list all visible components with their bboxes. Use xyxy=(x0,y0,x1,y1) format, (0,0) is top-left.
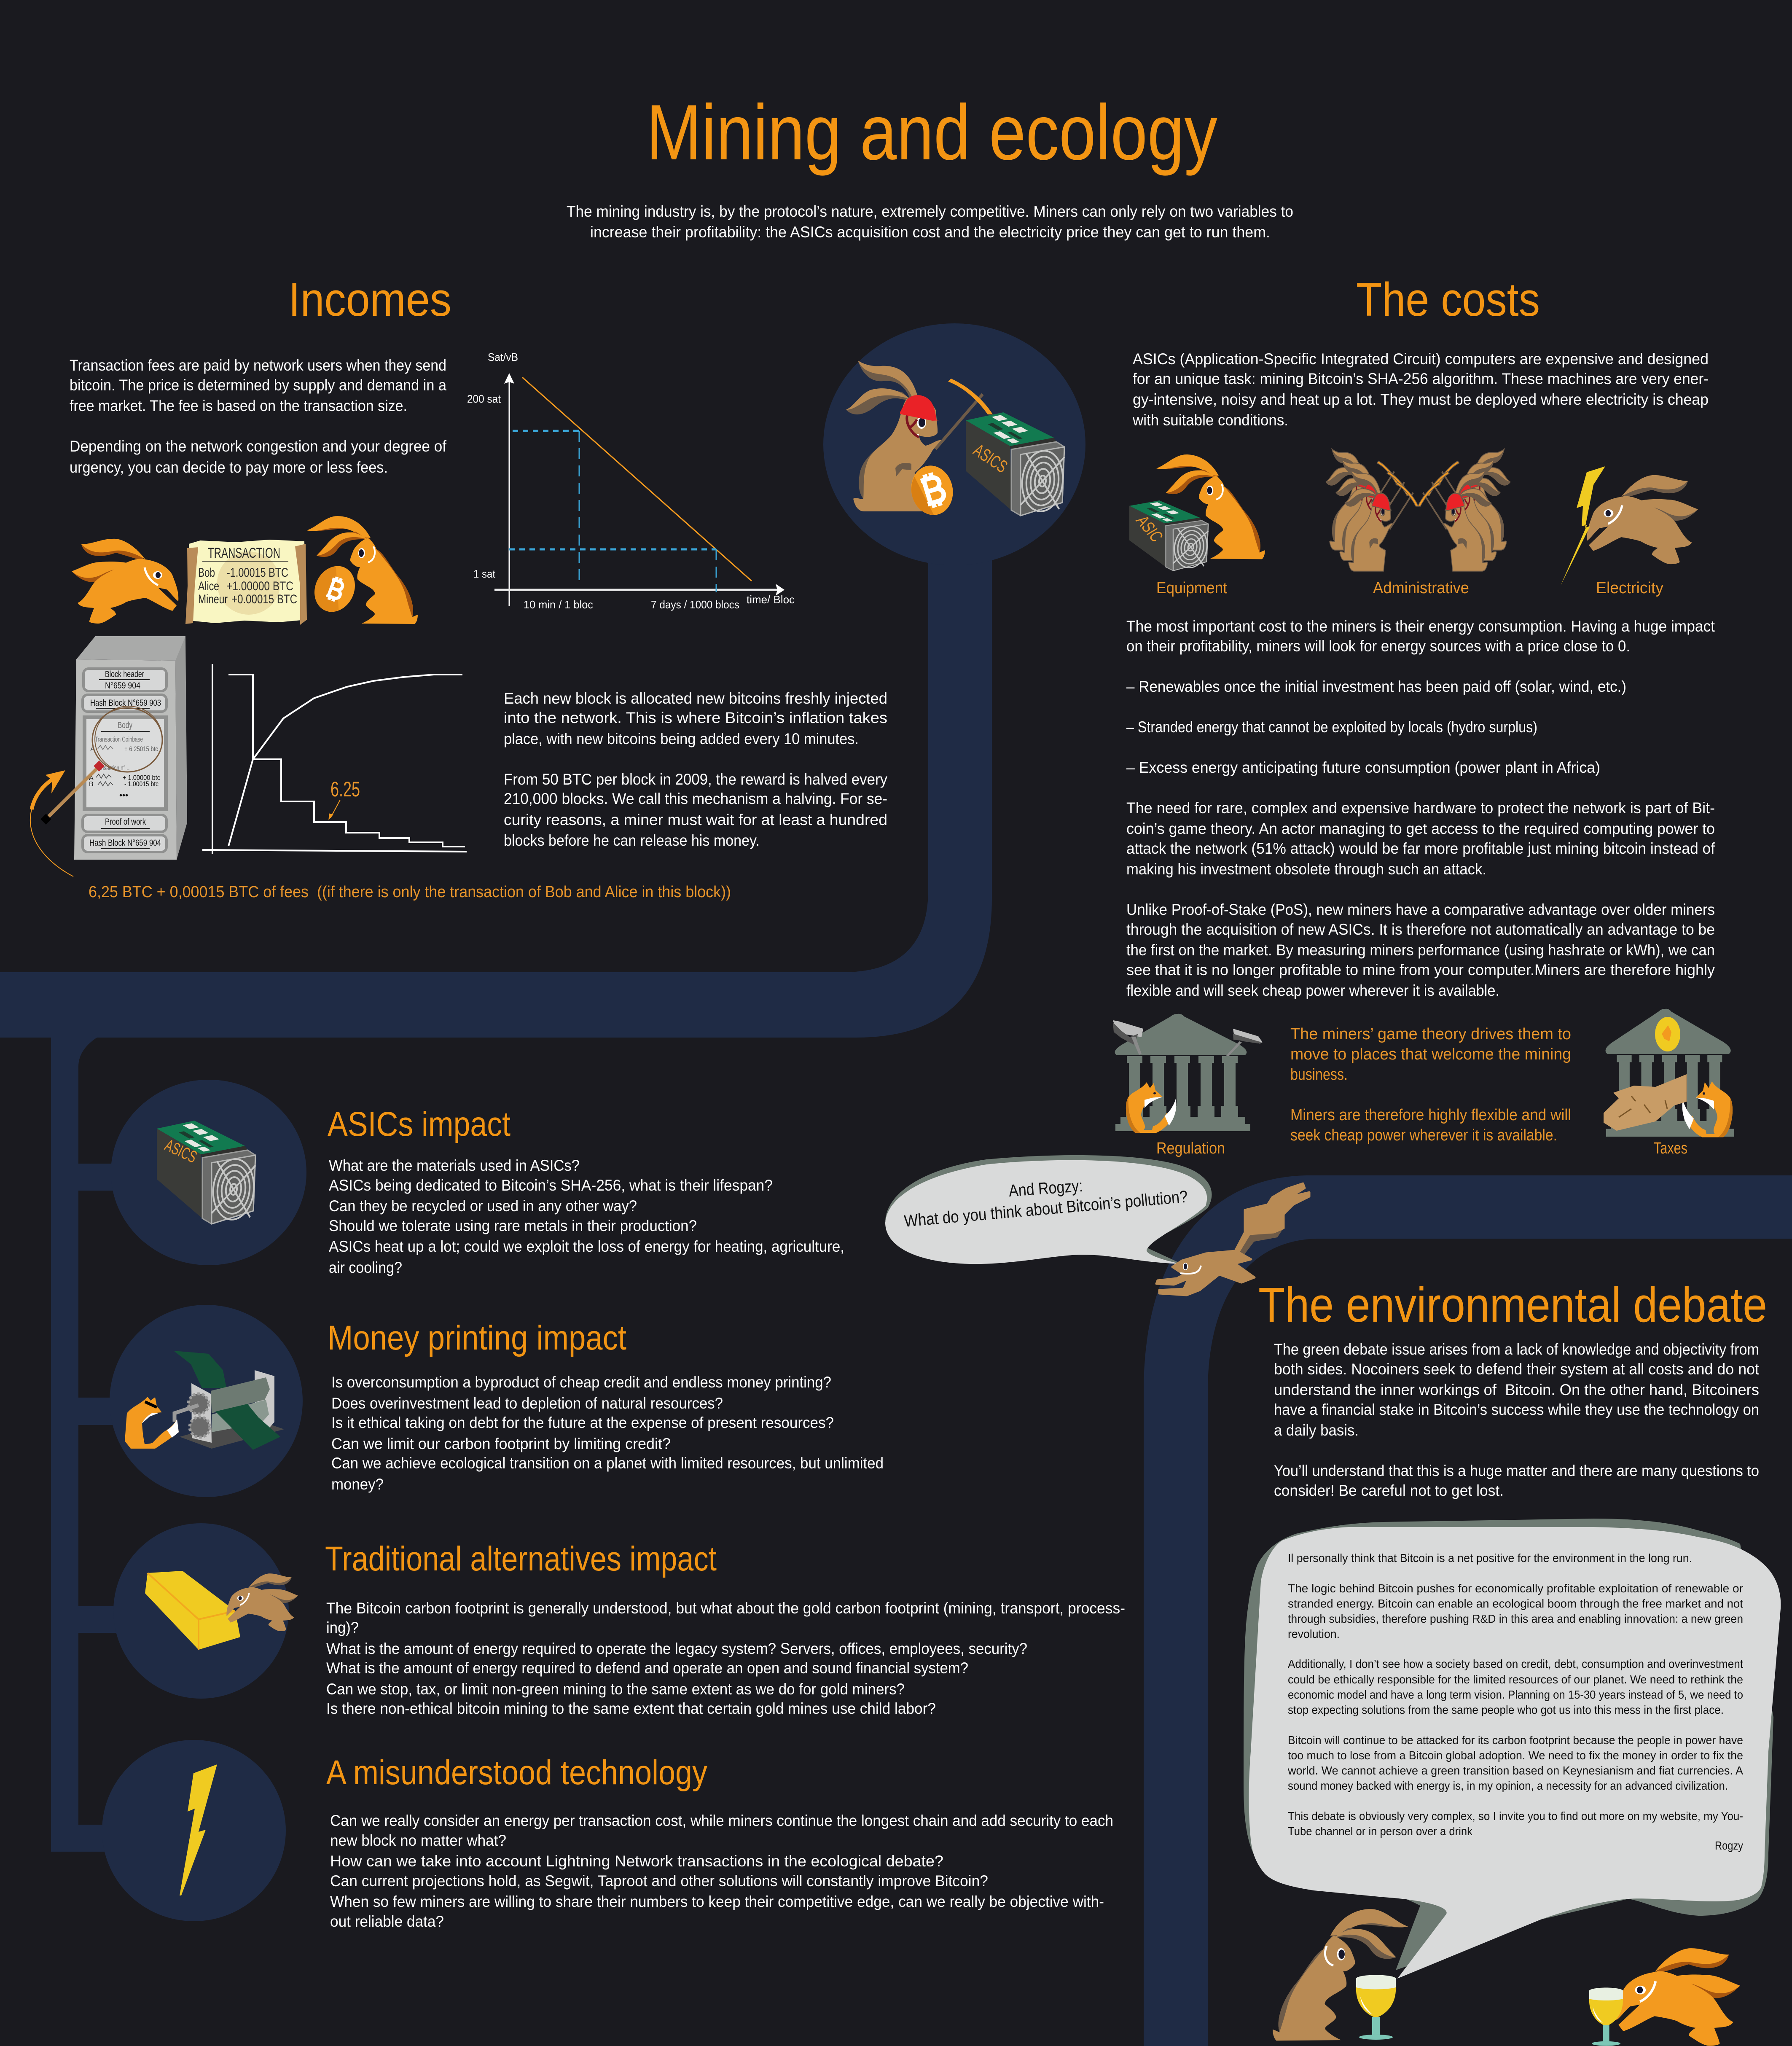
block server illustration: Transaction Coinbase xyxy=(95,735,143,743)
block server illustration: Hash Block N°659 904 xyxy=(89,838,161,848)
block server illustration: B xyxy=(89,781,94,788)
text: alternatives questions: The Bitcoin carbon footprint is generally understood, but what about the gold carbon footprint (mining, transport, process- xyxy=(326,1600,1125,1617)
text: money printing questions: Can we limit our carbon footprint by limiting credit? xyxy=(331,1435,671,1452)
costs text: energy consumption: – Excess energy anticipating future consumption (power plant in Africa) xyxy=(1126,759,1600,776)
fee chart: time/ Bloc xyxy=(747,593,795,606)
block server illustration: Proof of work xyxy=(105,817,146,827)
text: alternatives questions xyxy=(326,1600,1125,1717)
text: Rogzy's message: stop expecting solutions from the same people who got us into this mess in the first place. xyxy=(1288,1703,1724,1716)
text: money printing questions xyxy=(331,1374,884,1493)
costs text: energy consumption: – Stranded energy that cannot be exploited by locals (hydro surplus) xyxy=(1126,718,1537,736)
icon: miner rabbit with pick, bitcoin and ASIC xyxy=(846,360,1066,519)
text: environmental debate intro: a daily basis. xyxy=(1274,1422,1359,1439)
text: ASICs questions: air cooling? xyxy=(329,1259,402,1276)
fee chart: 7 days / 1000 blocs xyxy=(651,598,739,611)
intro text: increase their profitability: the ASICs acquisition cost and the electricity price they can get to run them. xyxy=(590,223,1270,241)
intro text xyxy=(567,203,1293,241)
icon: equipment xyxy=(1129,454,1265,571)
text: environmental debate intro: You’ll understand that this is a huge matter and there are many questions to xyxy=(1274,1462,1759,1479)
costs text: ASICs xyxy=(1132,350,1709,429)
text: technology questions: How can we take into account Lightning Network transactions in the ecological debate? xyxy=(330,1852,943,1870)
text: environmental debate intro: have a financial stake in Bitcoin’s success while they use the technology on xyxy=(1274,1401,1759,1418)
costs text: energy consumption: see that it is no longer profitable to mine from your computer.Miners are therefore highly xyxy=(1126,961,1715,979)
text: environmental debate intro: understand the inner workings of Bitcoin. On the other hand, Bitcoiners xyxy=(1274,1381,1759,1398)
icon: ASIC machine xyxy=(966,412,1066,516)
costs text: energy consumption: coin’s game theory. An actor managing to get access to the required computing power to xyxy=(1126,820,1715,837)
costs text: ASICs: for an unique task: mining Bitcoin’s SHA-256 algorithm. These machines are very ener- xyxy=(1133,370,1709,387)
incomes text: block reward: curity reasons, a miner must wait for at least a hundred xyxy=(504,811,887,828)
icon: regulation temple with cameras and fox xyxy=(1113,1014,1263,1133)
speech bubble: question to Rogzy: What do you think about Bitcoin’s pollution? xyxy=(903,1187,1188,1231)
incomes text: block reward: blocks before he can release his money. xyxy=(504,832,760,849)
text: money printing questions: Can we achieve ecological transition on a planet with limited resources, but unlimited xyxy=(331,1455,884,1472)
orange text: game theory: The miners’ game theory drives them to xyxy=(1290,1025,1571,1043)
text: ASICs questions: What are the materials used in ASICs? xyxy=(329,1157,580,1174)
block server illustration: N°659 904 xyxy=(105,681,140,691)
heading: incomes: Incomes xyxy=(288,273,451,326)
costs text: energy consumption: The need for rare, complex and expensive hardware to protect the network is part of Bit- xyxy=(1126,799,1715,817)
text: ASICs questions: Can they be recycled or used in any other way? xyxy=(329,1197,637,1215)
icon: equipment: ASIC xyxy=(1132,513,1167,545)
text: Rogzy's message: The logic behind Bitcoin pushes for economically profitable exploitation of renewable or xyxy=(1288,1582,1743,1595)
block server illustration: + 1.00000 btc xyxy=(123,774,160,782)
heading: traditional alternatives impact: Traditional alternatives impact xyxy=(325,1540,717,1578)
incomes text: transaction fees xyxy=(70,357,447,476)
text: Rogzy's message: stranded energy. Bitcoin can enable an ecological boom through the free market and not xyxy=(1288,1597,1743,1610)
text: money printing questions: Is overconsumption a byproduct of cheap credit and endless money printing? xyxy=(331,1374,831,1391)
text: Rogzy's message: could be ethically responsible for the limited resources of our planet. We need to rethink the xyxy=(1288,1673,1743,1686)
label: administrative: Administrative xyxy=(1373,579,1469,597)
text: money printing questions: Does overinvestment lead to depletion of natural resources? xyxy=(331,1395,723,1412)
block server illustration: Body xyxy=(118,721,132,730)
title: Mining and ecology xyxy=(646,89,1217,176)
costs text: energy consumption: attack the network (51% attack) would be far more profitable just mining bitcoin instead of xyxy=(1126,840,1715,857)
icon: running orange rabbit xyxy=(72,539,178,624)
block server illustration: Transaction n° ... xyxy=(94,764,131,772)
heading: a misunderstood technology: A misunderstood technology xyxy=(326,1753,707,1792)
fee chart: Sat/vB xyxy=(488,351,518,363)
costs text: energy consumption: flexible and will seek cheap power wherever it is available. xyxy=(1126,982,1499,999)
text: money printing questions: Is it ethical taking on debt for the future at the expense of present resources? xyxy=(331,1414,834,1431)
incomes text: block reward: place, with new bitcoins being added every 10 minutes. xyxy=(504,730,859,747)
incomes text: block reward xyxy=(504,690,887,849)
costs text: energy consumption: through the acquisition of new ASICs. It is therefore not automatically an advantage to be xyxy=(1126,921,1715,938)
incomes text: transaction fees: bitcoin. The price is determined by supply and demand in a xyxy=(70,376,446,394)
orange caption: block reward: 6,25 BTC + 0,00015 BTC of fees ((if there is only the transaction of Bob and Alice in this block)) xyxy=(89,883,731,901)
incomes text: block reward: into the network. This is where Bitcoin’s inflation takes xyxy=(504,709,887,726)
transaction scroll xyxy=(185,540,307,625)
icon: electricity rabbit and bolt xyxy=(1561,466,1698,586)
label: equipment: Equipment xyxy=(1156,579,1227,597)
transaction scroll: Alice xyxy=(198,579,219,593)
costs text: ASICs: ASICs (Application-Specific Integrated Circuit) computers are expensive and designed xyxy=(1133,350,1709,368)
heading: money printing impact: Money printing impact xyxy=(328,1319,626,1357)
incomes text: block reward: Each new block is allocated new bitcoins freshly injected xyxy=(504,690,887,707)
text: Rogzy's message: Tube channel or in person over a drink xyxy=(1288,1825,1473,1838)
text: technology questions: Can current projections hold, as Segwit, Taproot and other solutions will constantly improve Bitcoin? xyxy=(330,1872,988,1890)
text: Rogzy's message: through subsidies, therefore pushing R&D in this area and enabling innovation: a new green xyxy=(1288,1612,1743,1625)
icon circle: ASIC machine: ASICS xyxy=(162,1136,199,1167)
orange text: game theory: Miners are therefore highly flexible and will xyxy=(1290,1106,1571,1124)
panel: ASICs impact xyxy=(111,1080,844,1276)
block server illustration: ••• xyxy=(119,791,128,800)
panel: money printing impact xyxy=(110,1305,884,1497)
text: ASICs questions: ASICs being dedicated to Bitcoin’s SHA-256, what is their lifespan? xyxy=(329,1177,773,1194)
text: Rogzy's message: sound money backed with energy is, in my opinion, a necessity for an advanced civilization. xyxy=(1288,1779,1728,1792)
fee chart: 10 min / 1 bloc xyxy=(524,598,593,611)
text: environmental debate intro xyxy=(1274,1341,1760,1499)
speech bubble: Rogzy's opinion xyxy=(1244,1519,1781,1979)
fee chart xyxy=(467,351,795,611)
text: alternatives questions: What is the amount of energy required to defend and operate an open and sound financial system? xyxy=(326,1659,968,1677)
block server illustration: Hash Block N°659 903 xyxy=(90,698,161,708)
text: alternatives questions: Is there non-ethical bitcoin mining to the same extent that certain gold mines use child labor? xyxy=(326,1700,936,1717)
label: electricity: Electricity xyxy=(1596,579,1663,597)
orange text: game theory: business. xyxy=(1290,1066,1348,1083)
incomes text: transaction fees: Transaction fees are paid by network users when they send xyxy=(70,357,446,374)
transaction scroll: Bob xyxy=(198,566,215,580)
icon: brown rabbit with beer glass xyxy=(1273,1909,1408,2041)
text: Rogzy's message: economic model and have a long term vision. Planning on 15-30 years instead of 5, we need to xyxy=(1288,1688,1743,1701)
text: technology questions: out reliable data? xyxy=(330,1913,444,1930)
incomes text: transaction fees: urgency, you can decide to pay more or less fees. xyxy=(70,459,388,476)
icon: taxes temple with coin, hand and fox xyxy=(1604,1009,1734,1137)
text: technology questions: new block no matter what? xyxy=(330,1832,506,1849)
block server illustration: + 6.25015 btc xyxy=(124,745,158,753)
transaction scroll: -1.00015 BTC xyxy=(227,566,288,580)
costs text: energy consumption: on their profitability, miners will look for energy sources with a price close to 0. xyxy=(1126,637,1630,655)
text: ASICs questions: ASICs heat up a lot; could we exploit the loss of energy for heating, agriculture, xyxy=(329,1238,844,1255)
icon circle: ASIC machine xyxy=(111,1080,306,1265)
halving and hashrate chart xyxy=(202,664,467,854)
transaction scroll: TRANSACTION xyxy=(208,545,280,561)
costs text: energy consumption: making his investment obsolete through such an attack. xyxy=(1126,860,1486,878)
icon: magnifying glass xyxy=(40,706,162,825)
environmental pipe xyxy=(1144,1175,1792,2046)
panel: a misunderstood technology xyxy=(102,1740,1113,1930)
block server illustration: A xyxy=(89,774,94,782)
icon circle: lightning bolt xyxy=(102,1740,286,1921)
orange text: game theory: move to places that welcome the mining xyxy=(1290,1046,1571,1063)
orange text: game theory xyxy=(1290,1025,1571,1144)
icon circle: gold bar and rabbit xyxy=(113,1523,298,1699)
costs text: energy consumption: the first on the market. By measuring miners performance (using hashrate or kWh), we can xyxy=(1126,941,1715,959)
block server illustration: Block header xyxy=(105,669,144,679)
block server illustration xyxy=(74,636,187,860)
label: taxes: Taxes xyxy=(1654,1140,1687,1157)
halving and hashrate chart: 6.25 xyxy=(330,777,360,801)
text: alternatives questions: What is the amount of energy required to operate the legacy system? Servers, offices, employees, security? xyxy=(326,1640,1027,1657)
text: Rogzy's message: revolution. xyxy=(1288,1627,1340,1640)
label: regulation: Regulation xyxy=(1156,1140,1225,1157)
icon: orange rabbit with bitcoin egg xyxy=(307,516,418,624)
text: technology questions: When so few miners are willing to share their numbers to keep their competitive edge, can we really be objective with- xyxy=(330,1893,1104,1910)
transaction scroll: +0.00015 BTC xyxy=(231,592,297,606)
costs text: energy consumption: – Renewables once the initial investment has been paid off (solar, wind, etc.) xyxy=(1126,678,1626,695)
costs text: ASICs: gy-intensive, noisy and heat up a lot. They must be deployed where electricity is cheap xyxy=(1133,391,1709,408)
incomes text: transaction fees: free market. The fee is based on the transaction size. xyxy=(70,397,407,414)
text: technology questions xyxy=(330,1812,1113,1930)
icon: bitcoin egg xyxy=(907,462,957,519)
arrow: reward arc to block xyxy=(30,770,73,876)
icon circle: fox at money printer xyxy=(110,1305,303,1497)
text: ASICs questions xyxy=(329,1157,844,1276)
heading: the costs: The costs xyxy=(1356,273,1540,326)
intro text: The mining industry is, by the protocol’s nature, extremely competitive. Miners can only rely on two variables to xyxy=(567,203,1293,220)
text: alternatives questions: Can we stop, tax, or limit non-green mining to the same extent as we do for gold miners? xyxy=(326,1680,905,1698)
text: ASICs questions: Should we tolerate using rare metals in their production? xyxy=(329,1217,697,1234)
text: Rogzy's message: This debate is obviously very complex, so I invite you to find out more on my website, my You- xyxy=(1288,1809,1743,1823)
text: environmental debate intro: both sides. Nocoiners seek to defend their system at all costs and do not xyxy=(1274,1360,1760,1378)
speech bubble: question to Rogzy: And Rogzy: xyxy=(1008,1177,1083,1200)
block server illustration: A xyxy=(90,746,95,753)
text: environmental debate intro: consider! Be careful not to get lost. xyxy=(1274,1482,1504,1499)
icon: administrative miners xyxy=(1326,449,1510,571)
transaction scroll: +1.00000 BTC xyxy=(226,579,293,593)
transaction scroll: Mineur xyxy=(198,592,228,606)
text: Rogzy's message: Additionally, I don’t see how a society based on credit, debt, consumption and overinvestment xyxy=(1288,1657,1743,1670)
text: Rogzy's message: Rogzy xyxy=(1715,1839,1743,1852)
text: Rogzy's message: world. We cannot achieve a green transition based on Keynesianism and fiat currencies. A xyxy=(1287,1764,1743,1777)
text: Rogzy's message: Bitcoin will continue to be attacked for its carbon footprint because the people in power have xyxy=(1288,1734,1743,1747)
text: environmental debate intro: The green debate issue arises from a lack of knowledge and objectivity from xyxy=(1274,1341,1759,1358)
panel: traditional alternatives impact xyxy=(113,1523,1125,1717)
incomes text: block reward: 210,000 blocks. We call this mechanism a halving. For se- xyxy=(504,790,887,807)
heading: ASICs impact: ASICs impact xyxy=(328,1105,510,1143)
block server illustration: - 1.00015 btc xyxy=(124,780,159,788)
incomes text: transaction fees: Depending on the network congestion and your degree of xyxy=(70,438,447,455)
costs text: ASICs: with suitable conditions. xyxy=(1132,411,1288,429)
costs text: energy consumption: Unlike Proof-of-Stake (PoS), new miners have a comparative advantage over older miners xyxy=(1126,901,1715,918)
costs text: energy consumption xyxy=(1126,618,1715,999)
text: alternatives questions: ing)? xyxy=(326,1619,359,1636)
icon: orange rabbit with beer glass xyxy=(1589,1948,1740,2046)
top pipe connecting miner circle to incomes xyxy=(0,323,1085,1852)
incomes text: block reward: From 50 BTC per block in 2009, the reward is halved every xyxy=(504,771,887,788)
text: Rogzy's message: too much to lose from a Bitcoin global adoption. We need to fix the money in order to fix the xyxy=(1288,1749,1743,1762)
text: Rogzy's message xyxy=(1287,1551,1743,1852)
text: Rogzy's message: Il personally think that Bitcoin is a net positive for the environment in the long run. xyxy=(1288,1551,1692,1565)
fee chart: 1 sat xyxy=(473,567,496,580)
text: technology questions: Can we really consider an energy per transaction cost, while miners continue the longest chain and add security to each xyxy=(330,1812,1113,1829)
orange text: game theory: seek cheap power wherever it is available. xyxy=(1290,1127,1557,1144)
speech bubble: question to Rogzy xyxy=(885,1155,1212,1264)
text: money printing questions: money? xyxy=(331,1476,384,1493)
icon: ASIC machine: ASICS xyxy=(970,440,1011,477)
costs text: energy consumption: The most important cost to the miners is their energy consumption. Having a huge impact xyxy=(1126,618,1715,635)
icon: jumping rabbit xyxy=(1156,1183,1309,1295)
fee chart: 200 sat xyxy=(467,393,501,405)
